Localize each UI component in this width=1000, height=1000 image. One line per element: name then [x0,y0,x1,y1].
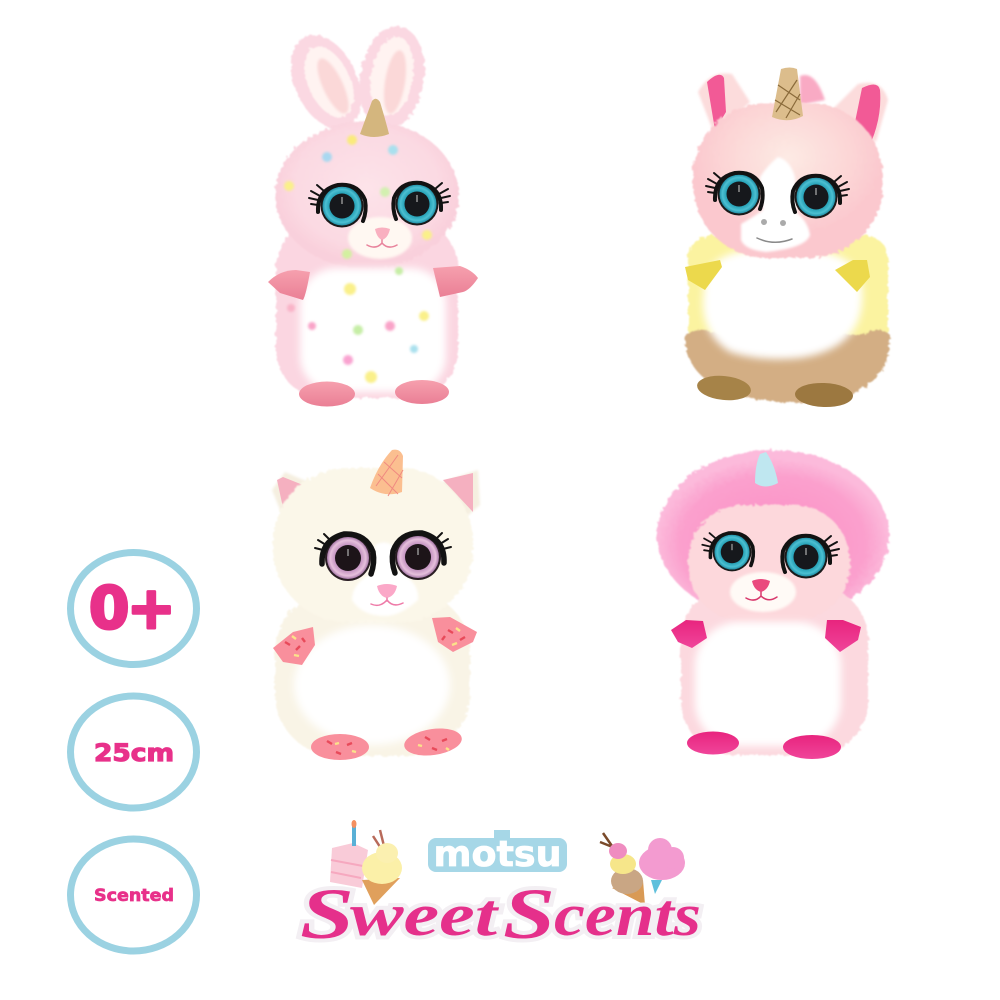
bunny nose [375,228,390,240]
hedgehog body and face [681,505,868,755]
bunny sprinkles [284,135,432,383]
cat mouth [371,598,403,605]
badge: scented [70,839,196,951]
logo: motsu sweet scents [300,820,701,954]
unicorn mane tuft [800,75,825,105]
unicorn head [693,103,883,258]
logo script title: S [300,874,354,954]
logo wordmark motsu: motsu [434,834,562,875]
hedgehog horn [755,452,778,486]
cat horn [370,450,403,496]
icon: cake slice and ice cream [330,820,402,905]
cat body [273,468,473,756]
plush: pink hedgehog unicorn [657,450,889,759]
unicorn nostrils and mouth [757,219,792,242]
unicorn horn [772,68,803,120]
bunny body and head [275,121,459,398]
unicorn arms and feet [685,260,870,408]
plush: cream cat unicorn [272,450,480,760]
hedgehog arms and feet [671,620,861,759]
hedgehog belly [695,622,841,746]
hedgehog muzzle [730,572,796,612]
cat white face [352,542,418,616]
bunny horn [360,99,389,137]
cat arms with sprinkles [273,617,477,665]
cat feet with sprinkles [311,725,464,760]
plush: spotted bunny unicorn [268,22,478,406]
badge: scented: Scented [94,886,174,906]
logo script title: weet [350,882,500,948]
hedgehog mane [657,450,889,620]
cat belly [294,625,450,745]
badge: age 0+ [70,552,196,664]
bunny arms and feet [268,266,478,406]
bunny muzzle [348,217,412,259]
plush: yellow and brown unicorn [685,68,890,408]
cat nose [377,584,397,598]
unicorn eyes [706,172,849,218]
bunny ears [277,22,432,140]
cat ears [272,470,480,522]
hedgehog eyes [702,533,839,578]
logo script title [300,874,701,954]
badge: size 25cm: 25cm [94,739,174,767]
hedgehog mouth [746,592,777,600]
cat eyes [315,533,451,581]
badge: size 25cm [70,696,196,808]
bunny mouth [367,240,397,247]
bunny eyes [309,182,450,228]
unicorn lower body [685,235,890,403]
unicorn white blaze [741,157,810,252]
unicorn belly [703,250,862,359]
logo script title: S [503,874,555,954]
badge: age 0+: 0+ [89,574,176,642]
unicorn ears [698,73,888,142]
logo script title: cents [554,882,701,948]
icon: ice cream and cotton candy [600,833,685,905]
bunny belly [300,268,446,392]
hedgehog nose [752,579,770,592]
